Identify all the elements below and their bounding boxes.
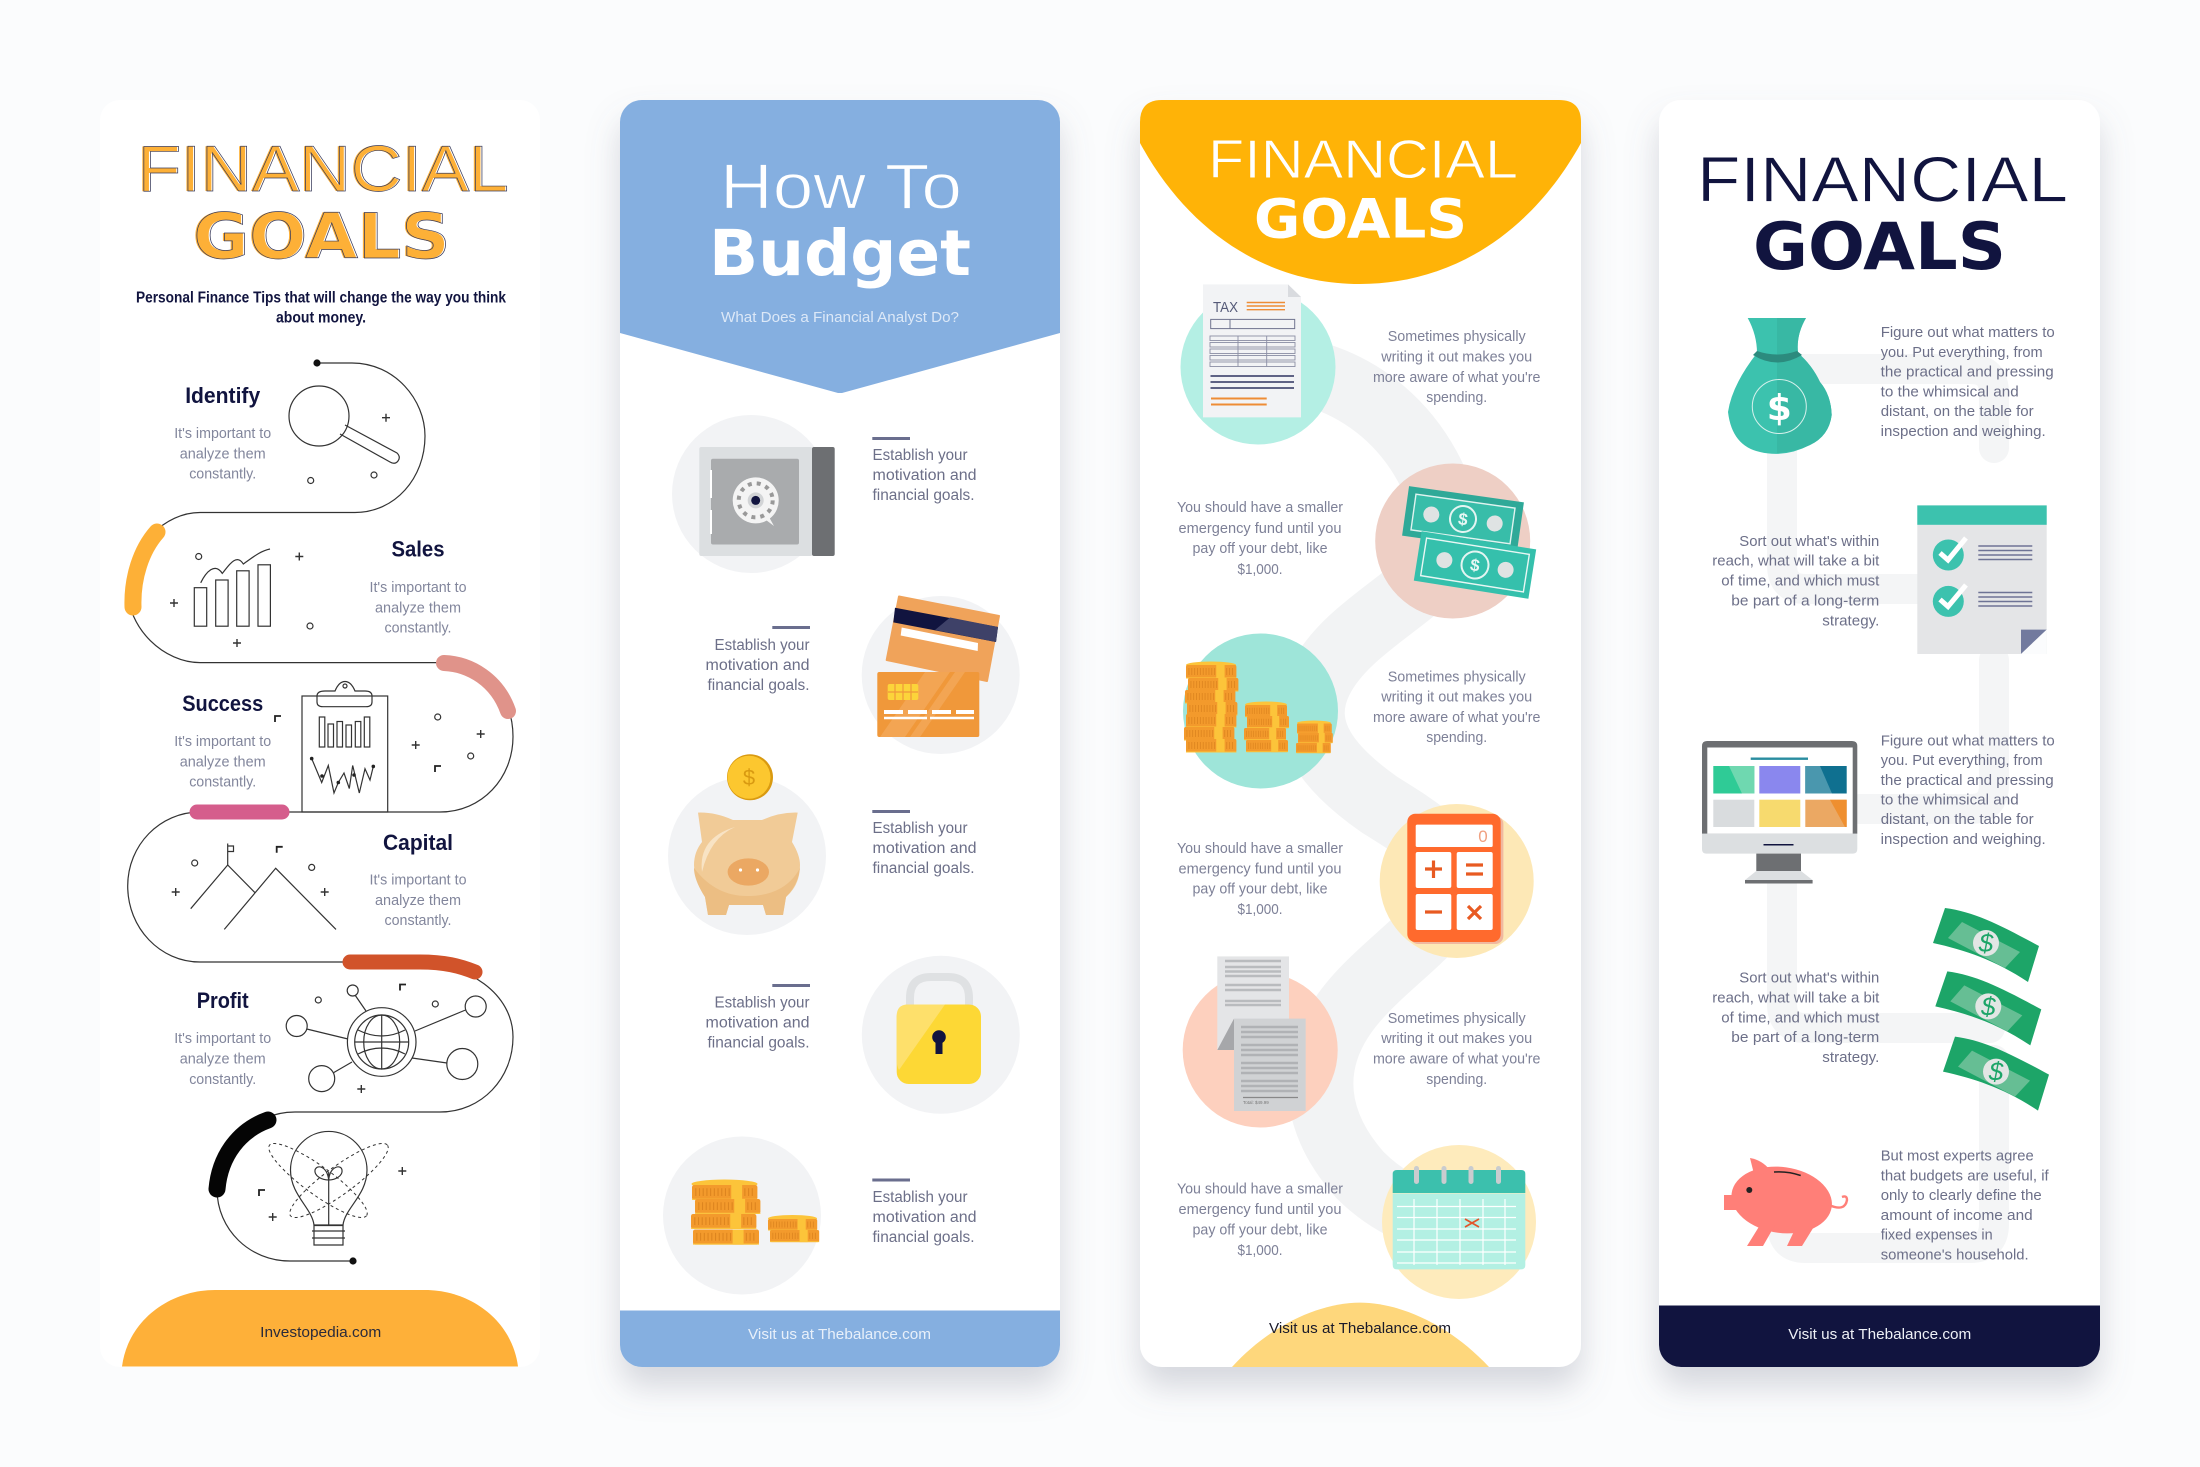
text: right one: Sometimes physically bbox=[1388, 328, 1526, 345]
subtitle: What Does a Financial Analyst Do? bbox=[721, 309, 959, 326]
text: block one: inspection and weighing. bbox=[1881, 423, 2046, 440]
panel: how to budget bbox=[620, 100, 1060, 1367]
icon: light bulb with sprout bbox=[259, 1131, 406, 1245]
text: sales body bbox=[370, 579, 466, 636]
heading: capital: Capital bbox=[383, 830, 453, 855]
icon: flying green bills: $ bbox=[1978, 928, 1994, 958]
icon: credit cards bbox=[862, 596, 1020, 754]
footer: investopedia: Investopedia.com bbox=[260, 1324, 381, 1341]
icon: flying green bills: $ bbox=[1988, 1057, 2004, 1087]
subtitle: Personal Finance Tips that will change the way you think bbox=[136, 290, 506, 306]
footer: yellow arc: Visit us at Thebalance.com bbox=[1269, 1320, 1451, 1337]
title: financial goals navy: GOALS bbox=[1753, 210, 2006, 285]
text: left three: emergency fund until you bbox=[1178, 1201, 1342, 1218]
icon: stacked coins bbox=[663, 1136, 821, 1294]
text: sales body: It's important to bbox=[370, 579, 466, 596]
text: block two: strategy. bbox=[1822, 612, 1879, 629]
text: block five bbox=[1881, 1147, 2050, 1264]
title: how to budget: How To bbox=[720, 151, 962, 223]
text: identify body: constantly. bbox=[189, 466, 256, 482]
icon: safe bbox=[672, 415, 835, 573]
icon: banknotes bbox=[1375, 464, 1536, 618]
title: financial goals navy: FINANCIAL bbox=[1697, 144, 2068, 216]
panel: financial goals orange bbox=[1140, 100, 1581, 1367]
text: left three bbox=[1177, 1181, 1343, 1259]
text: step four bbox=[706, 984, 810, 1052]
text: left one: pay off your debt, like bbox=[1192, 540, 1328, 557]
panel: identify to profit line-art infographic bbox=[100, 100, 540, 1367]
text: identify body bbox=[174, 425, 271, 482]
text: block five: But most experts agree bbox=[1881, 1147, 2034, 1164]
text: identify body: It's important to bbox=[174, 425, 271, 442]
footer: visit us navy: Visit us at Thebalance.com bbox=[1788, 1326, 1971, 1343]
icon: globe network bbox=[286, 984, 486, 1093]
winding timeline line with coloured segments bbox=[127, 359, 513, 1265]
text: right one bbox=[1373, 328, 1540, 406]
header banner bbox=[620, 100, 1060, 393]
text: step three bbox=[872, 810, 976, 877]
text: right three: spending. bbox=[1426, 1071, 1487, 1088]
title: how to budget bbox=[709, 151, 971, 290]
text: step two: Establish your bbox=[714, 637, 810, 654]
icon: bar chart with arrow bbox=[170, 549, 313, 647]
text: step four: motivation and bbox=[706, 1014, 810, 1032]
text: left two: You should have a smaller bbox=[1177, 840, 1343, 857]
text: right two: writing it out makes you bbox=[1380, 688, 1532, 706]
text: block two: reach, what will take a bit bbox=[1712, 553, 1880, 570]
text: right three: Sometimes physically bbox=[1388, 1010, 1526, 1027]
icon: receipts: Total: $49.99 bbox=[1243, 1100, 1269, 1105]
icon: coin stacks bbox=[1183, 634, 1338, 788]
title: financial goals navy bbox=[1697, 144, 2068, 285]
text: block two: be part of a long-term bbox=[1731, 593, 1879, 610]
title: financial goals outlined bbox=[136, 132, 509, 273]
icon: banknotes: $ bbox=[1457, 509, 1469, 530]
text: profit body: constantly. bbox=[189, 1071, 256, 1088]
text: sales body: constantly. bbox=[384, 620, 452, 636]
text: left two: pay off your debt, like bbox=[1192, 880, 1328, 898]
text: right three: more aware of what you're bbox=[1373, 1050, 1540, 1068]
text: left two: emergency fund until you bbox=[1178, 860, 1342, 878]
icon: banknotes: $ bbox=[1469, 555, 1482, 576]
header: orange arc bbox=[1140, 100, 1581, 284]
heading: profit: Profit bbox=[197, 988, 249, 1013]
footer: investopedia bbox=[122, 1290, 518, 1366]
text: capital body: constantly. bbox=[384, 912, 452, 929]
text: right one: writing it out makes you bbox=[1380, 348, 1532, 366]
icon: pink piggy bbox=[1724, 1158, 1847, 1246]
text: right two bbox=[1373, 668, 1540, 746]
heading: sales: Sales bbox=[392, 536, 444, 562]
icon: receipts bbox=[1183, 956, 1338, 1128]
text: step five bbox=[872, 1178, 976, 1246]
text: block one: to the whimsical and bbox=[1881, 383, 2019, 400]
icon: piggy bank with coin bbox=[668, 754, 826, 935]
text: block two: Sort out what's within bbox=[1739, 533, 1879, 550]
icon: calculator: 0 bbox=[1478, 827, 1488, 846]
icon: money bag: $ bbox=[1767, 388, 1792, 429]
text: identify body: analyze them bbox=[180, 446, 266, 462]
text: block three: inspection and weighing. bbox=[1881, 831, 2046, 848]
text: block three: to the whimsical and bbox=[1881, 791, 2019, 808]
icon: clipboard with charts bbox=[275, 682, 485, 812]
text: left one: You should have a smaller bbox=[1177, 499, 1343, 516]
text: capital body bbox=[370, 872, 466, 929]
text: block three: distant, on the table for bbox=[1881, 811, 2034, 828]
text: right two: more aware of what you're bbox=[1373, 709, 1540, 726]
text: left three: $1,000. bbox=[1238, 1242, 1282, 1259]
text: block one: the practical and pressing bbox=[1881, 364, 2054, 381]
title: financial goals white bbox=[1208, 128, 1518, 250]
text: capital body: analyze them bbox=[375, 892, 461, 909]
text: step four: Establish your bbox=[714, 994, 810, 1012]
text: success body bbox=[174, 733, 271, 790]
text: block five: only to clearly define the bbox=[1881, 1187, 2042, 1204]
text: step three: Establish your bbox=[872, 820, 968, 837]
footer: visit us blue bbox=[620, 1310, 1060, 1367]
text: step one bbox=[872, 437, 976, 504]
text: sales body: analyze them bbox=[375, 600, 461, 616]
text: block four: of time, and which must bbox=[1721, 1009, 1880, 1026]
text: left three: pay off your debt, like bbox=[1192, 1222, 1328, 1238]
text: block two: of time, and which must bbox=[1721, 572, 1880, 589]
title: financial goals outlined: FINANCIAL bbox=[136, 132, 508, 205]
text: block one: you. Put everything, from bbox=[1881, 344, 2043, 361]
icon: calculator bbox=[1380, 804, 1534, 958]
icon: desktop monitor bbox=[1702, 741, 1857, 884]
title: financial goals outlined: GOALS bbox=[194, 200, 450, 273]
text: success body: analyze them bbox=[180, 754, 266, 770]
text: block five: fixed expenses in bbox=[1881, 1227, 1993, 1244]
subtitle bbox=[136, 290, 506, 326]
text: step three: motivation and bbox=[872, 840, 976, 857]
text: step two: financial goals. bbox=[708, 677, 810, 694]
text: step one: financial goals. bbox=[872, 487, 974, 504]
text: block two bbox=[1712, 533, 1880, 629]
winding grey road bbox=[1258, 367, 1459, 1222]
text: right three: writing it out makes you bbox=[1380, 1030, 1532, 1047]
text: right three bbox=[1373, 1010, 1540, 1088]
text: profit body: analyze them bbox=[180, 1050, 266, 1068]
text: step two: motivation and bbox=[706, 657, 810, 674]
text: step two bbox=[706, 626, 810, 694]
text: step one: Establish your bbox=[872, 447, 968, 464]
icon: checklist bbox=[1917, 505, 2047, 654]
text: block four: Sort out what's within bbox=[1739, 970, 1879, 986]
text: block five: that budgets are useful, if bbox=[1881, 1167, 2050, 1184]
text: capital body: It's important to bbox=[370, 872, 466, 888]
text: profit body bbox=[174, 1030, 271, 1088]
text: block three bbox=[1881, 732, 2055, 848]
text: block one: Figure out what matters to bbox=[1881, 324, 2055, 341]
title: financial goals outlined: FINANCIAL bbox=[138, 132, 509, 205]
footer: visit us blue: Visit us at Thebalance.com bbox=[748, 1326, 931, 1343]
text: block four: strategy. bbox=[1822, 1049, 1879, 1066]
text: step three: financial goals. bbox=[872, 860, 974, 877]
connector road bbox=[1782, 369, 1994, 1248]
text: block three: you. Put everything, from bbox=[1881, 752, 2043, 769]
title: financial goals white: GOALS bbox=[1254, 188, 1467, 250]
text: block four: reach, what will take a bit bbox=[1712, 989, 1880, 1006]
heading: identify: Identify bbox=[185, 383, 261, 408]
text: right one: more aware of what you're bbox=[1373, 369, 1540, 386]
icon: mountains with flag bbox=[172, 844, 336, 929]
text: right two: spending. bbox=[1426, 729, 1487, 746]
title: how to budget: Budget bbox=[709, 217, 971, 290]
text: block one: distant, on the table for bbox=[1881, 403, 2034, 420]
icon: money bag bbox=[1728, 318, 1832, 454]
text: success body: It's important to bbox=[174, 733, 271, 750]
text: block five: amount of income and bbox=[1881, 1207, 2033, 1224]
icon: flying green bills bbox=[1933, 908, 2049, 1111]
text: block three: the practical and pressing bbox=[1881, 772, 2054, 789]
text: block one bbox=[1881, 324, 2055, 440]
icon: calendar bbox=[1382, 1145, 1536, 1299]
footer: yellow arc bbox=[1232, 1303, 1489, 1367]
text: block three: Figure out what matters to bbox=[1881, 732, 2055, 749]
text: step five: financial goals. bbox=[872, 1229, 974, 1246]
text: left two bbox=[1177, 840, 1343, 918]
text: left one: $1,000. bbox=[1238, 561, 1282, 578]
icon: tax form: TAX bbox=[1213, 299, 1238, 316]
text: left one bbox=[1177, 499, 1343, 578]
text: step one: motivation and bbox=[872, 467, 976, 484]
heading: success: Success bbox=[182, 691, 263, 716]
text: block four: be part of a long-term bbox=[1731, 1029, 1879, 1046]
panel: financial goals navy bbox=[1659, 100, 2100, 1367]
text: step five: motivation and bbox=[872, 1209, 976, 1226]
subtitle: about money. bbox=[276, 310, 366, 326]
text: step five: Establish your bbox=[872, 1189, 968, 1206]
icon: padlock bbox=[862, 956, 1020, 1114]
text: right one: spending. bbox=[1426, 389, 1487, 406]
icon: piggy bank with coin: $ bbox=[743, 765, 755, 790]
text: block five: someone's household. bbox=[1881, 1246, 2029, 1264]
text: success body: constantly. bbox=[189, 774, 256, 790]
icon: magnifying glass bbox=[289, 386, 399, 484]
icon: flying green bills: $ bbox=[1980, 991, 1996, 1021]
text: left one: emergency fund until you bbox=[1178, 520, 1342, 537]
text: step four: financial goals. bbox=[708, 1034, 810, 1052]
text: left two: $1,000. bbox=[1238, 901, 1282, 918]
text: profit body: It's important to bbox=[174, 1030, 271, 1047]
icon: tax form bbox=[1180, 284, 1336, 444]
title: financial goals white: FINANCIAL bbox=[1208, 128, 1518, 190]
text: block four bbox=[1712, 970, 1880, 1066]
text: right two: Sometimes physically bbox=[1388, 668, 1526, 685]
title: financial goals outlined: GOALS bbox=[192, 200, 449, 273]
text: left three: You should have a smaller bbox=[1177, 1181, 1343, 1198]
footer: visit us navy bbox=[1659, 1306, 2100, 1367]
